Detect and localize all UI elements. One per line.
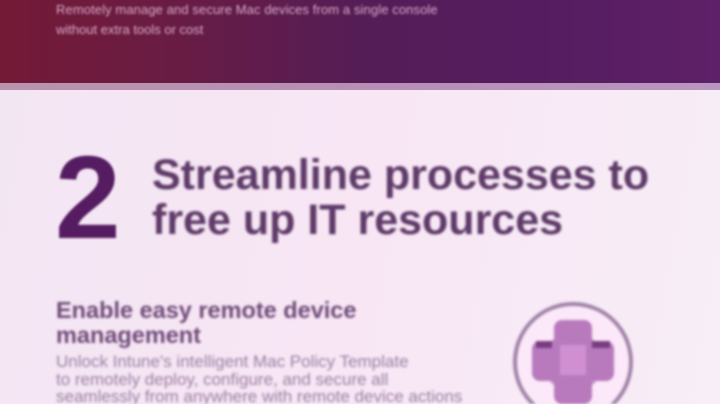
subheading: Enable easy remote device: [56, 297, 356, 323]
header text block: [55, 2, 438, 37]
body text: [55, 353, 463, 404]
section heading: Streamline processes to: [152, 151, 649, 199]
page background panel: [0, 90, 720, 404]
header band: [0, 0, 720, 83]
header bottom strip: [0, 83, 720, 90]
icon centre cross: [532, 320, 614, 404]
section heading: free up IT resources: [152, 196, 563, 244]
icon ring: [515, 304, 631, 404]
subheading: management: [56, 322, 201, 348]
header text block: without extra tools or cost: [56, 22, 203, 37]
icon: circular device management badge: [512, 300, 634, 404]
subheading: [56, 297, 358, 350]
section heading: [150, 151, 650, 245]
body text: to remotely deploy, configure, and secure all: [56, 370, 388, 388]
header text block: Remotely manage and secure Mac devices from a single console: [56, 2, 438, 17]
section number 2: 2: [55, 132, 121, 264]
